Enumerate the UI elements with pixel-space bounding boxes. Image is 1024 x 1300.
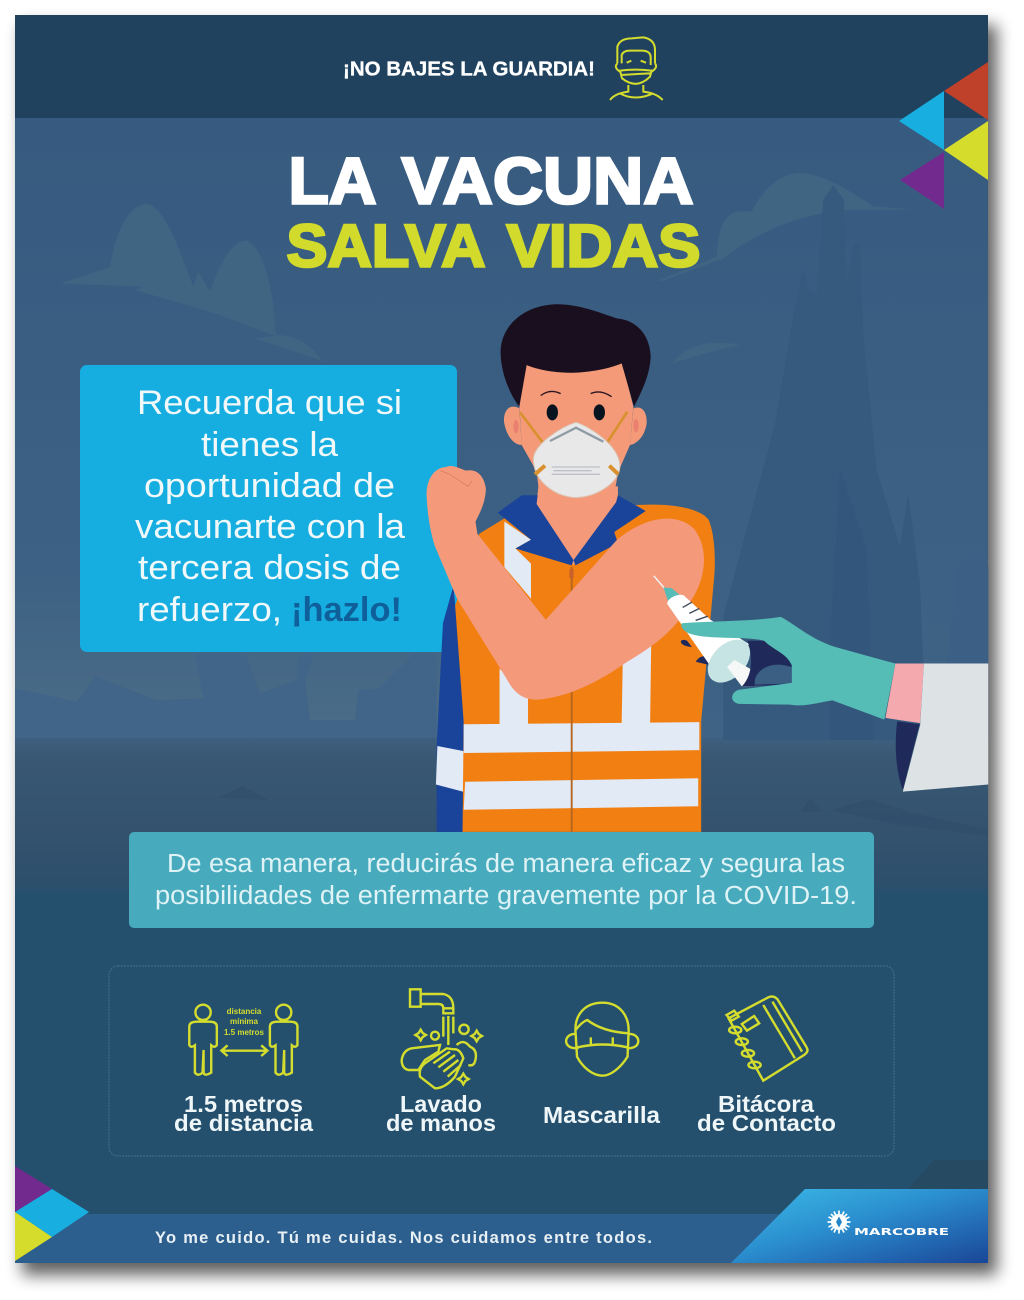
worker neck and collar (498, 486, 646, 565)
panel: reminder: vacunarte con la (135, 508, 405, 546)
corner triangles: bottom left (15, 1166, 89, 1261)
doctor cuff and coat (885, 664, 988, 792)
panel: reminder: oportunidad de (144, 467, 395, 505)
icon: face mask (566, 1003, 638, 1076)
background mountains (15, 173, 988, 1189)
worker head (501, 304, 651, 495)
syringe (654, 576, 766, 690)
panel: reminder: tercera dosis de (138, 549, 401, 587)
panel: reminder: Recuerda que si (137, 384, 402, 422)
label: contact log (697, 1091, 836, 1136)
panel: message: posibilidades de enfermarte gravemente por la COVID-19. (155, 882, 857, 910)
header band (15, 15, 988, 118)
panel: reminder: refuerzo, (137, 591, 282, 629)
panel: message: De esa manera, reducirás de manera eficaz y segura las (167, 850, 845, 878)
title: VIDAS (506, 212, 700, 280)
gloved hand (681, 617, 895, 720)
label: distance: de distancia (174, 1110, 313, 1136)
icon: masked face (610, 37, 663, 100)
title: VACUNA (402, 144, 694, 218)
logo wordmark: MARCOBRE (854, 1227, 949, 1238)
panel: prevention measures (109, 966, 894, 1156)
label: hand washing (386, 1091, 496, 1136)
panel: reminder: tienes la (201, 426, 338, 464)
label: contact log: Bitácora (718, 1091, 814, 1117)
icon: distance: mínima (230, 1017, 259, 1026)
panel: reminder: ¡hazlo! (291, 591, 402, 629)
left hills (60, 204, 330, 363)
illustration: worker and vaccinating hand (427, 304, 988, 832)
header slogan: ¡NO BAJES LA GUARDIA! (343, 58, 595, 80)
icon: distance: 1.5 metros (224, 1028, 265, 1037)
worker sleeve (436, 586, 465, 832)
logo block (731, 1189, 988, 1263)
panel: reminder (80, 365, 457, 652)
label: distance (174, 1091, 313, 1136)
title: LA (288, 144, 376, 218)
icon: logo star (828, 1210, 850, 1234)
worker raised arm (427, 466, 704, 700)
label: distance: 1.5 metros (184, 1091, 303, 1117)
icon: notebook (727, 997, 807, 1081)
label: mask: Mascarilla (543, 1102, 660, 1128)
corner triangles: top right (899, 62, 988, 209)
worker vest (455, 505, 715, 832)
lower left rocks (15, 653, 437, 738)
title (286, 144, 700, 280)
label: contact log: de Contacto (697, 1110, 836, 1136)
worker mask (520, 412, 627, 498)
panel: message (129, 832, 874, 928)
icon: distance (189, 1005, 297, 1075)
title: SALVA (286, 212, 486, 280)
label: hand washing: de manos (386, 1110, 496, 1136)
right peaks (660, 173, 988, 740)
footer band (15, 1214, 795, 1263)
label: hand washing: Lavado (400, 1091, 482, 1117)
footer slogan: Yo me cuido. Tú me cuidas. Nos cuidamos entre todos. (155, 1229, 652, 1247)
icon: distance: distancia (227, 1007, 262, 1016)
ground ridges (218, 786, 988, 836)
icon: hand washing (402, 989, 482, 1088)
